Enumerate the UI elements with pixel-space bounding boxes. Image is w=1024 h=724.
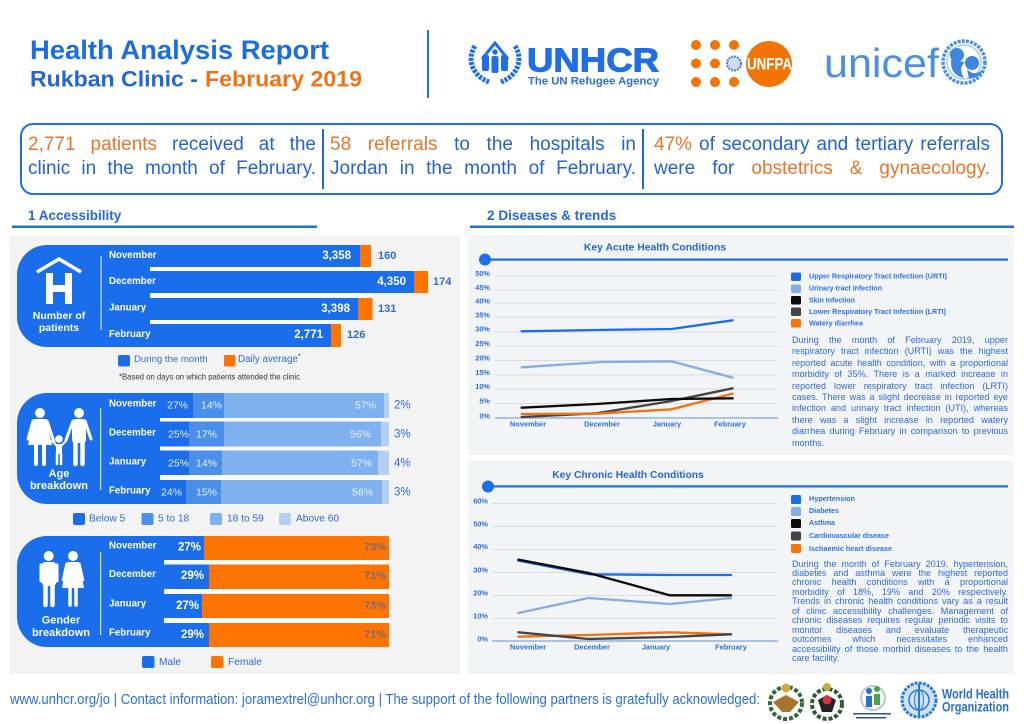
chart: key acute health conditions: 20% [475, 354, 490, 362]
paragraph: acute conditions: During the month of February 2019, upper [792, 335, 1008, 345]
chart: key acute health conditions: 30% [475, 324, 490, 334]
legend: patients: Daily average [238, 354, 298, 365]
chart: key acute health conditions: November [510, 420, 546, 428]
chart: key acute health conditions: Key Acute Health Conditions [584, 242, 726, 254]
panel: number of patients [17, 245, 452, 347]
summary box [20, 123, 1003, 195]
legend: acute conditions [791, 272, 948, 328]
logo: partner emblem 1 [770, 684, 802, 719]
panel: gender breakdown: November [109, 540, 157, 552]
panel: age breakdown: January [109, 456, 147, 468]
legend: chronic conditions: Cardiovascular disease [809, 531, 889, 540]
panel: gender breakdown: February [109, 628, 151, 638]
bars: daily average [331, 245, 428, 347]
legend: gender [142, 656, 262, 668]
paragraph: chronic conditions: accessibility of those morbid diseases to the health [792, 644, 1008, 654]
divider: summary two [642, 129, 644, 189]
panel: age breakdown: 25% [168, 458, 189, 470]
panel: age breakdown: November [109, 398, 157, 410]
chart: key acute health conditions: January [653, 420, 682, 428]
chart: key chronic health conditions: 0% [477, 634, 488, 644]
title [30, 35, 362, 92]
chart: key chronic health conditions: 40% [473, 542, 488, 551]
chart: key chronic health conditions: Key Chronic Health Conditions [552, 470, 704, 481]
paragraph: acute conditions: respiratory tract infection (URTI) was the highest [792, 346, 1008, 356]
title: Health Analysis Report [30, 35, 329, 65]
summary: patients: clinic in the month of February. [28, 158, 316, 179]
panel: number of patients: February [109, 329, 151, 340]
panel: gender breakdown: breakdown [32, 627, 90, 639]
panel: gender breakdown: 29% [181, 629, 204, 641]
paragraph: acute conditions: morbidity of 35%. There is a marked increase in [792, 369, 1008, 379]
divider: summary one [322, 129, 324, 189]
summary: patients: 2,771 patients received at the [28, 134, 316, 155]
icon: family [28, 408, 91, 464]
chart: key chronic health conditions: December [574, 642, 610, 652]
chart: key acute health conditions [475, 242, 1008, 428]
chart: key acute health conditions: 0% [479, 412, 490, 420]
logo: unicef: unicef [824, 40, 940, 86]
paragraph: chronic conditions [792, 558, 1008, 663]
legend: gender: Female [228, 657, 262, 668]
panel: age breakdown: 27% [167, 400, 188, 412]
panel: gender breakdown: December [109, 569, 156, 580]
panel: number of patients: 126 [347, 329, 365, 341]
panel: age breakdown [17, 393, 411, 504]
panel: age breakdown: 58% [352, 486, 373, 498]
panel: accessibility background [10, 236, 460, 674]
summary: secondary and tertiary referrals [654, 134, 990, 179]
heading: 1 Accessibility: 1 Accessibility [28, 208, 122, 223]
chart: key acute health conditions: 15% [475, 368, 490, 377]
title: Rukban Clinic - [30, 66, 198, 92]
logo: partner emblem 2 [812, 683, 842, 719]
chart: key acute health conditions: 50% [475, 269, 490, 278]
logo: partner emblem 3 [853, 686, 891, 718]
panel: age breakdown: February [109, 486, 151, 496]
chart: key chronic health conditions: 10% [473, 612, 488, 620]
panel: number of patients: 174 [433, 276, 452, 288]
paragraph: chronic conditions: morbidity of 18%, 19% and 20% respectively. [792, 587, 1008, 597]
panel: gender breakdown [17, 536, 389, 647]
summary: referrals [330, 134, 636, 179]
legend: age: Above 60 [296, 514, 339, 524]
legend: chronic conditions [791, 494, 892, 553]
chart: key chronic health conditions: 50% [473, 520, 488, 528]
panel: age breakdown: 56% [350, 428, 371, 440]
paragraph: chronic conditions: Trends in chronic health conditions vary as a result [792, 596, 1008, 606]
summary: patients [28, 134, 316, 179]
panel: age breakdown: 17% [196, 428, 217, 440]
panel: number of patients: 160 [378, 250, 396, 262]
paragraph: chronic conditions: of clinic accessibility challenges. Management of [792, 606, 1008, 616]
legend: age: Below 5 [89, 514, 126, 524]
panel: age breakdown: 2% [394, 400, 411, 412]
panel: number of patients: 131 [378, 303, 396, 315]
stacked bars: age [186, 393, 389, 504]
panel: age breakdown: 24% [161, 486, 182, 498]
chart: key acute health conditions: 45% [475, 283, 490, 292]
panel: age breakdown: breakdown [30, 480, 88, 492]
legend: age [73, 513, 339, 525]
paragraph: acute conditions: reported lower respiratory tract infection (LRTI) [792, 381, 1008, 391]
panel: chronic conditions background [468, 461, 1014, 674]
panel: gender breakdown: 71% [364, 629, 386, 641]
logo: World Health Organization: Organization [942, 700, 1009, 714]
chart: key acute health conditions: 35% [475, 310, 490, 320]
legend: patients: * [298, 353, 301, 360]
legend: gender: Male [159, 657, 181, 668]
legend: acute conditions: Urinary tract Infection [809, 284, 882, 292]
panel: age breakdown: 15% [196, 486, 217, 498]
legend: chronic conditions: Ischaemic heart disease [809, 544, 892, 553]
icon: man and woman [41, 551, 84, 605]
logo: World Health Organization [902, 683, 1009, 717]
paragraph: chronic conditions: During the month of February 2019, hypertension, [792, 558, 1008, 568]
paragraph: chronic conditions: care facility. [792, 653, 839, 663]
panel: gender breakdown: 27% [178, 542, 201, 554]
legend: acute conditions: Upper Respiratory Tract Infection (URTI) [809, 272, 948, 280]
footer text: www.unhcr.org/jo | Contact information: joramextrel@unhcr.org | The support of the following partners is gratefully acknowledged: [9, 692, 760, 708]
legend: age: 18 to 59 [227, 514, 264, 524]
panel: acute conditions background [468, 235, 1014, 455]
logo: UNHCR: The UN Refugee Agency [528, 76, 660, 88]
chart: key chronic health conditions: 30% [473, 566, 488, 574]
panel: age breakdown: Age [49, 468, 69, 480]
summary: referrals: 58 referrals to the hospitals in [330, 134, 636, 155]
summary: secondary and tertiary referrals: were for obstetrics & gynaecology. [654, 158, 990, 179]
paragraph: acute conditions: there was a slight increase in reported watery [792, 415, 1008, 425]
logo: UNFPA: UNFPA [747, 54, 792, 74]
panel: number of patients: Number of [33, 310, 86, 322]
panel: number of patients: December [109, 276, 156, 287]
paragraph: chronic conditions: chronic health conditions with a proportional [792, 577, 1008, 587]
paragraph: acute conditions: months. [792, 438, 824, 448]
chart: key acute health conditions: 25% [475, 339, 490, 348]
logo: UNHCR: UNHCR [527, 42, 659, 78]
legend: patients: During the month [134, 354, 208, 365]
stacked bars: female [202, 536, 389, 647]
chart: key acute health conditions: December [584, 420, 620, 428]
panel: age breakdown: 25% [168, 428, 189, 440]
panel: number of patients: January [109, 302, 147, 314]
paragraph: acute conditions: cases. There was a slight decrease in reported eye [792, 392, 1008, 402]
panel: age breakdown: 4% [394, 458, 411, 470]
chart: key acute health conditions: 5% [479, 396, 490, 406]
heading: 2 Diseases & trends: 2 Diseases & trends [487, 208, 616, 223]
legend: chronic conditions: Hypertension [809, 494, 855, 503]
panel: gender breakdown: 29% [181, 570, 204, 582]
panel: gender breakdown: 73% [364, 542, 386, 554]
paragraph: acute conditions: reported acute health condition, with a proportional [792, 358, 1008, 368]
panel: gender breakdown: 27% [176, 600, 199, 612]
panel: age breakdown: 14% [201, 400, 222, 412]
panel: number of patients: November [109, 250, 157, 261]
panel: gender breakdown: 71% [364, 570, 386, 582]
logo: World Health Organization: World Health [942, 686, 1009, 702]
panel: gender breakdown: January [109, 598, 147, 610]
paragraph: acute conditions: diarrhea during February in comparison to previous [792, 426, 1008, 436]
legend: chronic conditions: Asthma [809, 518, 836, 527]
panel: number of patients: 3,398 [321, 303, 351, 315]
icon: clinic house [37, 259, 81, 304]
chart: key chronic health conditions [473, 470, 1008, 652]
legend: acute conditions: Lower Respiratory Tract Infection (LRTI) [809, 307, 947, 316]
panel: gender breakdown: Gender [42, 614, 81, 626]
panel: number of patients: patients [39, 322, 79, 334]
paragraph: chronic conditions: chronic diseases requires regular periodic visits to [792, 615, 1008, 625]
paragraph: chronic conditions: monitor diseases and evaluate therapeutic [792, 625, 1008, 635]
legend: acute conditions: Skin Infection [809, 296, 855, 304]
summary: secondary and tertiary referrals: 47% of secondary and tertiary referrals [654, 134, 990, 155]
panel: age breakdown: December [109, 428, 156, 438]
logo: unicef [824, 40, 985, 86]
logo: UNHCR [471, 42, 660, 88]
chart: key chronic health conditions: 60% [473, 496, 488, 506]
paragraph: chronic conditions: outcomes which necessitates enhanced [792, 634, 1008, 644]
panel: age breakdown: 57% [351, 458, 372, 470]
chart: key chronic health conditions: January [642, 642, 671, 652]
legend: patients: *Based on days on which patients attended the clinic [119, 372, 300, 382]
chart: key chronic health conditions: February [715, 642, 748, 652]
panel: age breakdown: 3% [394, 428, 411, 440]
chart: key chronic health conditions: November [510, 642, 546, 652]
panel: number of patients: 4,350 [377, 276, 406, 288]
panel: age breakdown: 57% [355, 400, 376, 412]
panel: number of patients: 3,358 [322, 250, 352, 262]
paragraph: chronic conditions: diabetes and asthma were the highest reported [792, 568, 1008, 578]
panel: age breakdown: 3% [394, 486, 411, 498]
legend: chronic conditions: Diabetes [809, 506, 839, 515]
legend: age: 5 to 18 [158, 514, 189, 524]
panel: gender breakdown: 73% [364, 600, 386, 612]
chart: key acute health conditions: February [714, 420, 747, 428]
legend: acute conditions: Watery diarrhea [809, 318, 864, 328]
paragraph: acute conditions: infection and urinary tract infection (UTI), whereas [792, 403, 1008, 413]
chart: key acute health conditions: 10% [475, 382, 490, 391]
chart: key acute health conditions: 40% [475, 296, 490, 306]
logo: UNFPA [691, 40, 792, 87]
paragraph: acute conditions [792, 335, 1008, 448]
summary: referrals: Jordan in the month of February. [330, 158, 636, 179]
panel: age breakdown: 14% [196, 458, 217, 470]
chart: key chronic health conditions: 20% [473, 588, 488, 598]
title: February 2019 [205, 66, 362, 92]
legend: patients [118, 353, 301, 382]
panel: number of patients: 2,771 [294, 329, 324, 341]
